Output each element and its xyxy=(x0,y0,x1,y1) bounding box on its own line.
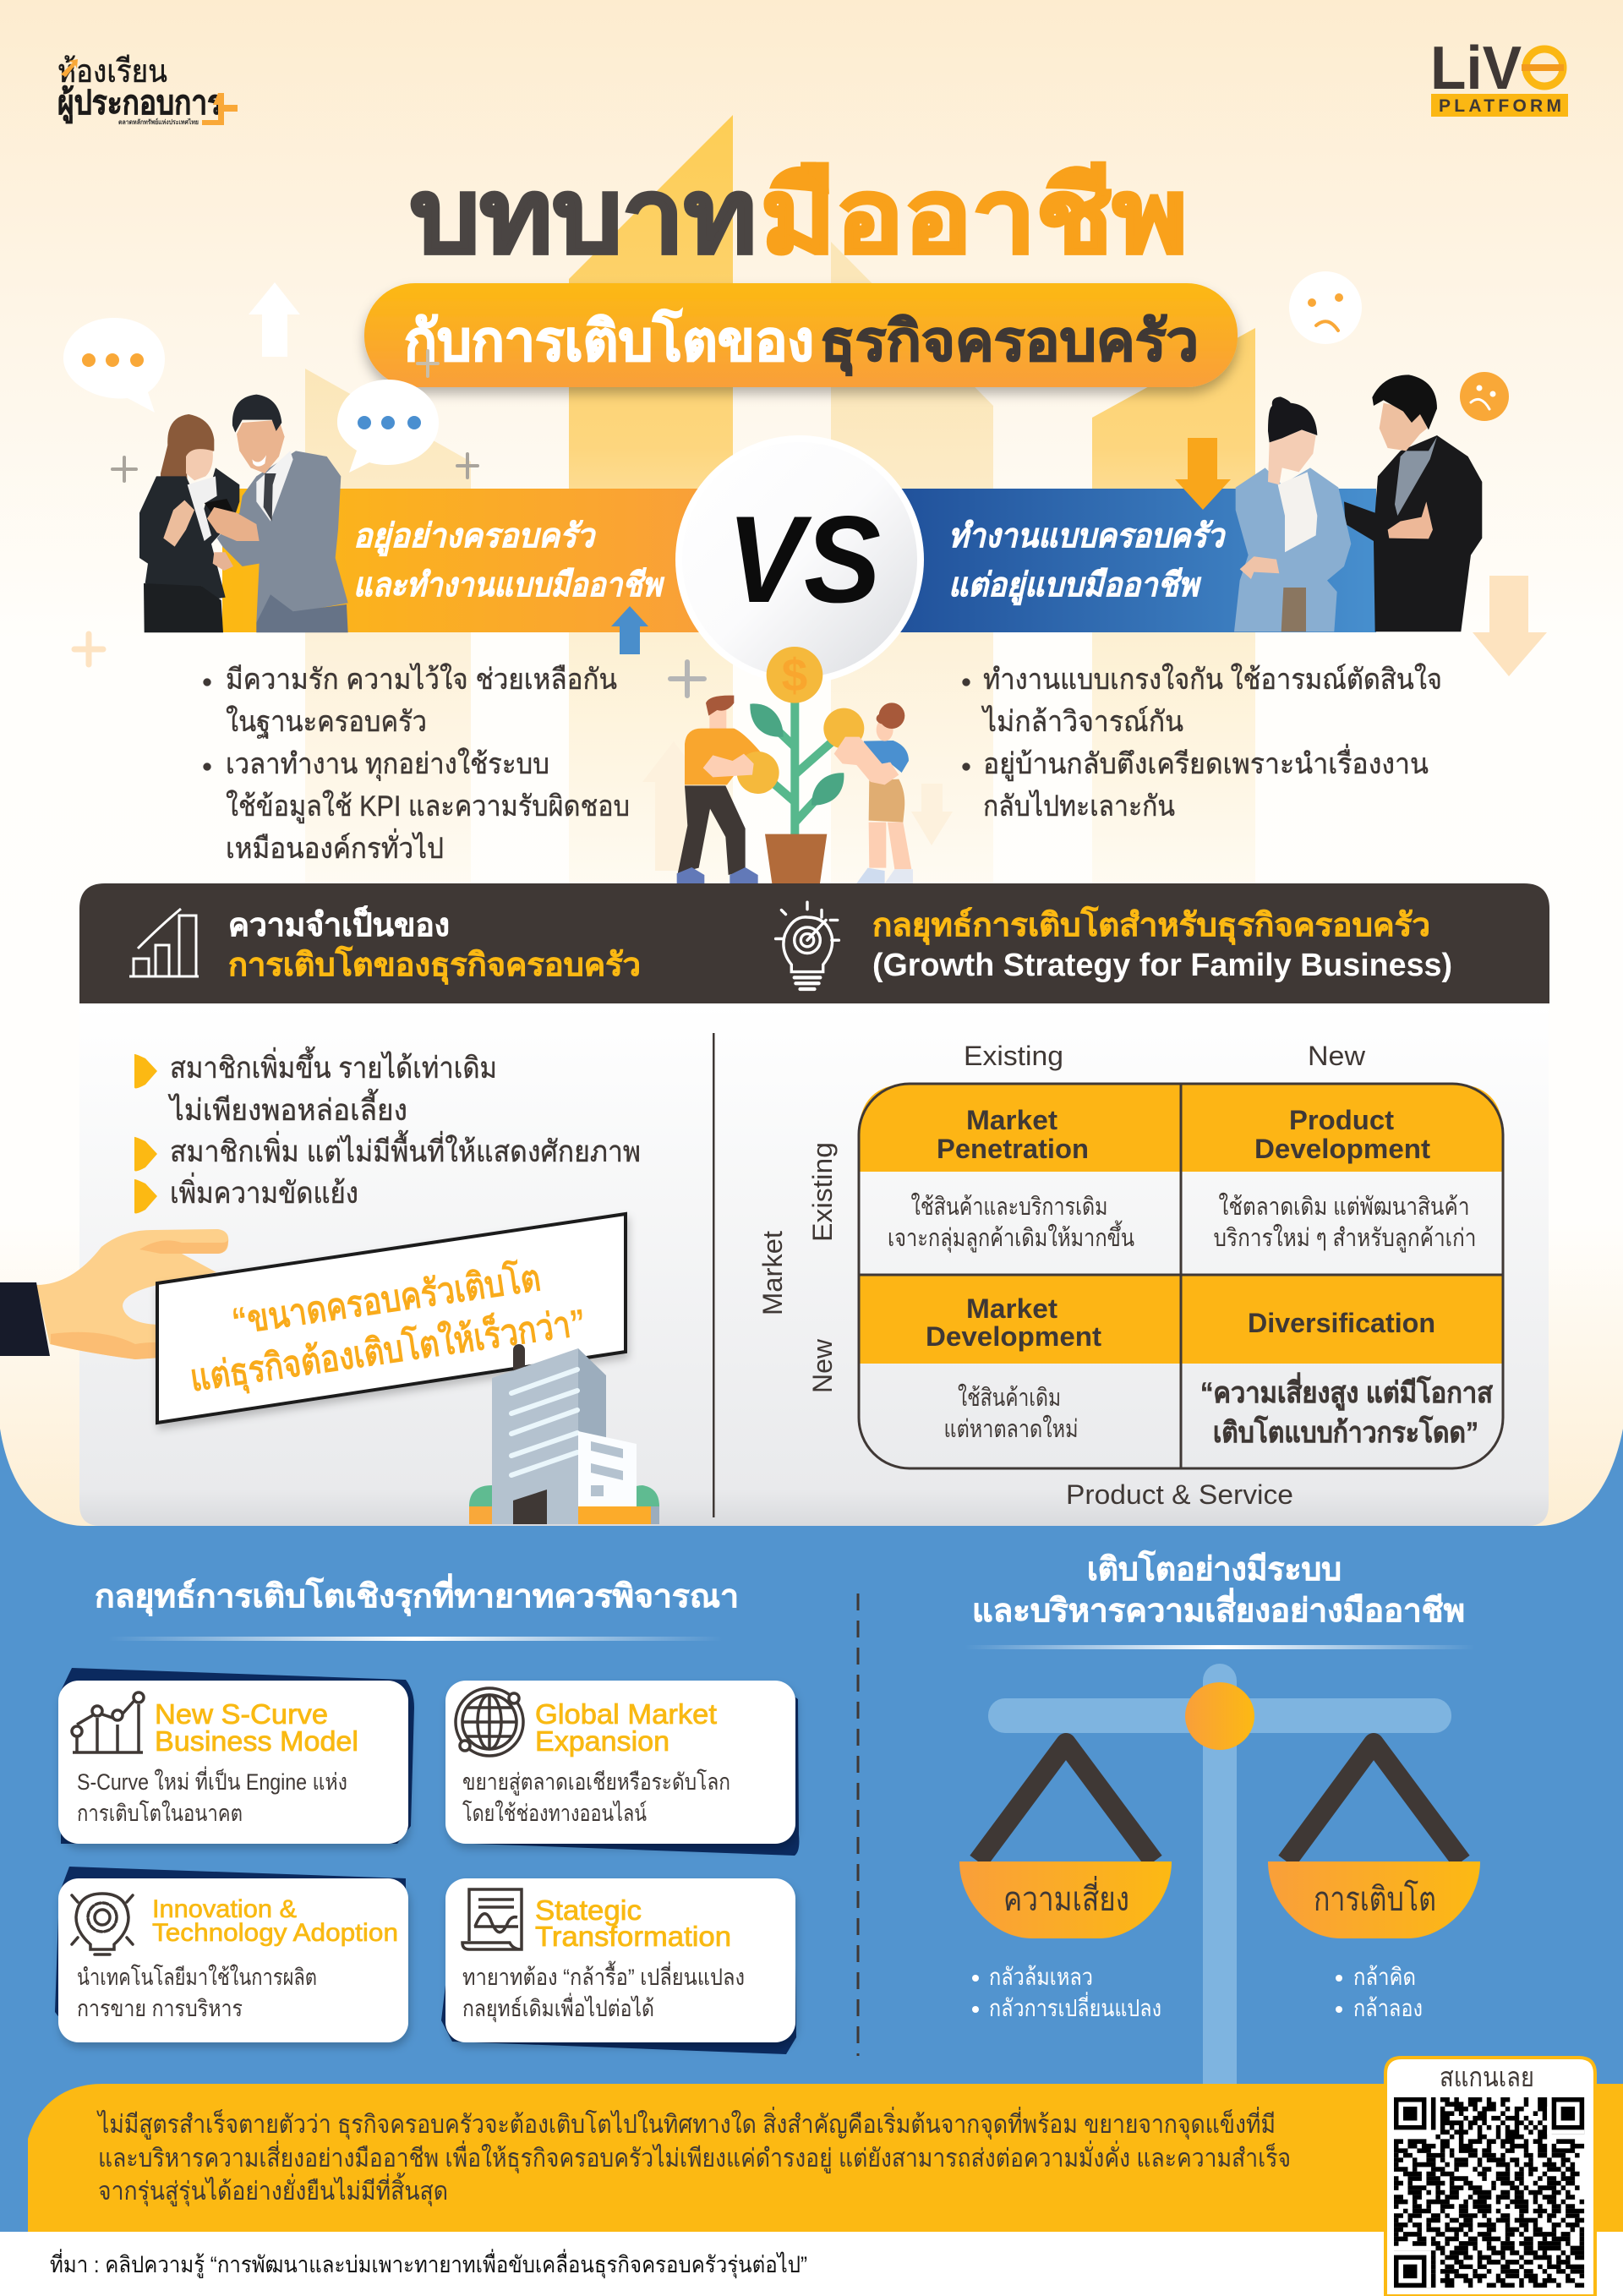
illustration: money plant with two people: $ xyxy=(782,648,807,701)
right pan: growth: การเติบโต xyxy=(1314,1880,1436,1918)
illustration: hand xyxy=(0,1229,228,1359)
cell: market penetration: Penetration xyxy=(937,1134,1089,1164)
subtitle pill: ธุรกิจครอบครัว xyxy=(820,309,1199,376)
list: why growth matters xyxy=(134,1046,641,1213)
icon: white sad face xyxy=(1289,271,1362,344)
cell: product development: บริการใหม่ ๆ สำหรับลูกค้าเก่า xyxy=(1214,1223,1476,1253)
cell: product development: ใช้ตลาดเดิม แต่พัฒนาสินค้า xyxy=(1219,1192,1469,1221)
card: innovation: Innovation & xyxy=(152,1895,297,1923)
cell: market development: Market xyxy=(966,1293,1057,1324)
card: global market xyxy=(445,1681,799,1856)
list: why growth matters: เพิ่มความขัดแย้ง xyxy=(170,1173,358,1210)
banner: left orange xyxy=(222,489,721,632)
VS circle xyxy=(675,435,924,684)
heading: systematic growth xyxy=(965,1550,1475,1649)
title xyxy=(410,159,1188,274)
conclusion banner: และบริหารความเสี่ยงอย่างมืออาชีพ เพื่อให้ธุรกิจครอบครัวไม่เพียงแค่ดำรงอยู่ แต่ยังสามารถส่งต่อความมั่งคั่ง และความสำเร็จ xyxy=(98,2140,1291,2174)
header text: necessity: การเติบโตของธุรกิจครอบครัว xyxy=(228,945,641,985)
callout sign: แต่ธุรกิจต้องเติบโตให้เร็วกว่า” xyxy=(187,1299,588,1402)
header text: growth strategy xyxy=(872,905,1452,983)
background rising arrows xyxy=(305,115,1255,947)
right pan: growth xyxy=(1268,1861,1480,1938)
card: new s-curve: S-Curve ใหม่ ที่เป็น Engine แห่ง xyxy=(77,1766,347,1795)
card: new s-curve: การเติบโตในอนาคต xyxy=(77,1800,243,1826)
icon: speech bubble blue dots xyxy=(337,380,439,473)
logo: ห้องเรียนผู้ประกอบการ xyxy=(57,54,238,126)
conclusion banner xyxy=(28,2084,1623,2232)
bullets: left: ในฐานะครอบครัว xyxy=(226,705,427,739)
people: happy couple xyxy=(139,395,348,632)
blue lower background xyxy=(0,1395,1623,2232)
logo: ห้องเรียนผู้ประกอบการ: ตลาดหลักทรัพย์แห่งประเทศไทย xyxy=(118,118,199,126)
cell: product development: Development xyxy=(1254,1134,1430,1164)
logo: LiVe Platform xyxy=(1430,35,1568,117)
bullets: left: ใช้ข้อมูลใช้ KPI และความรับผิดชอบ xyxy=(226,790,630,823)
icon: globe xyxy=(456,1688,523,1756)
cell: product development: Product xyxy=(1289,1105,1394,1135)
bullets: right: ไม่กล้าวิจารณ์กัน xyxy=(981,705,1183,738)
cell: diversification: “ความเสี่ยงสูง แต่มีโอกาส xyxy=(1200,1372,1493,1411)
callout sign xyxy=(157,1214,626,1423)
list: why growth matters: สมาชิกเพิ่มขึ้น รายได้เท่าเดิม xyxy=(170,1046,497,1085)
source note: ที่มา : คลิปความรู้ “การพัฒนาและบ่มเพาะทายาทเพื่อขับเคลื่อนธุรกิจครอบครัวรุ่นต่อไป” xyxy=(50,2249,807,2279)
cell: diversification: Diversification xyxy=(1248,1308,1435,1338)
list: courage xyxy=(1336,1964,1423,2021)
card: innovation: นำเทคโนโลยีมาใช้ในการผลิต xyxy=(77,1964,317,1990)
cell: market development: ใช้สินค้าเดิม xyxy=(958,1383,1061,1412)
illustration: building xyxy=(469,1344,659,1524)
list: fears: กลัวล้มเหลว xyxy=(989,1964,1093,1990)
matrix orange headers xyxy=(859,1084,1503,1364)
banner text: left: อยู่อย่างครอบครัว xyxy=(353,518,597,556)
card: global market: โดยใช้ช่องทางออนไลน์ xyxy=(462,1800,647,1826)
bullets: right: ทำงานแบบเกรงใจกัน ใช้อารมณ์ตัดสินใจ xyxy=(983,663,1442,696)
subtitle pill xyxy=(364,283,1238,387)
card: strategic transformation: Transformation xyxy=(535,1921,731,1952)
card: strategic transformation: Stategic xyxy=(535,1894,642,1926)
icon: light bulb target xyxy=(776,902,839,989)
qr card xyxy=(1385,2058,1595,2296)
dashed vertical divider xyxy=(857,1594,859,2056)
banner text: right: ทำงานแบบครอบครัว xyxy=(948,518,1227,555)
card: global market: Expansion xyxy=(535,1725,669,1757)
heading: systematic growth: และบริหารความเสี่ยงอย่างมืออาชีพ xyxy=(972,1588,1465,1629)
qr card: สแกนเลย xyxy=(1440,2062,1534,2092)
icon: orange down arrow xyxy=(1175,438,1231,510)
icon: bar chart xyxy=(129,909,199,976)
heading: proactive strategies: กลยุทธ์การเติบโตเชิงรุกที่ทายาทควรพิจารณา xyxy=(95,1573,739,1616)
matrix axis labels: Product & Service xyxy=(1066,1479,1293,1510)
cell: market penetration xyxy=(888,1105,1134,1253)
bullets: left: มีความรัก ความไว้ใจ ช่วยเหลือกัน xyxy=(226,663,617,696)
VS circle: VS xyxy=(727,490,881,628)
matrix axis labels xyxy=(757,1041,1366,1510)
card: strategic transformation: กลยุทธ์เดิมเพื่อไปต่อได้ xyxy=(462,1993,654,2023)
banner text: right xyxy=(948,518,1227,605)
card: innovation: Technology Adoption xyxy=(152,1919,398,1947)
list: why growth matters: ไม่เพียงพอหล่อเลี้ยง xyxy=(167,1088,407,1127)
left pan: risk xyxy=(959,1861,1172,1938)
list: courage: กล้าลอง xyxy=(1353,1995,1423,2021)
cell: market development: แต่หาตลาดใหม่ xyxy=(943,1414,1079,1443)
banner: right blue xyxy=(879,489,1376,632)
title: มืออาชีพ xyxy=(761,159,1188,274)
banner text: left xyxy=(353,518,665,604)
card: strategic transformation xyxy=(441,1878,796,2054)
icon: speech bubble orange dots xyxy=(63,318,165,413)
matrix axis labels: Existing xyxy=(807,1142,838,1242)
card: new s-curve: Business Model xyxy=(155,1725,358,1757)
header text: necessity xyxy=(228,905,641,985)
icon: orange sad face xyxy=(1460,372,1509,421)
white footer background xyxy=(0,2232,1623,2296)
cell: market penetration: Market xyxy=(966,1105,1057,1135)
icon: gear bulb xyxy=(72,1894,133,1954)
icon: growth chart xyxy=(72,1692,144,1752)
card: global market: Global Market xyxy=(535,1698,717,1730)
card: strategic transformation: ทายาทต้อง “กล้ารื้อ” เปลี่ยนแปลง xyxy=(462,1960,745,1990)
conclusion banner: ไม่มีสูตรสำเร็จตายตัวว่า ธุรกิจครอบครัวจะต้องเติบโตไปในทิศทางใด สิ่งสำคัญคือเริ่มต้นจากจุดที่พร้อม ขยายจากจุดแข็งที่มี xyxy=(96,2107,1276,2140)
card: new s-curve xyxy=(58,1668,414,1844)
left pan chains xyxy=(978,1743,1154,1861)
people: worried couple xyxy=(1234,374,1482,631)
bullets: right xyxy=(962,663,1442,823)
cream upper background xyxy=(0,0,1623,1526)
callout sign: “ขนาดครอบครัวเติบโต xyxy=(229,1255,544,1342)
matrix axis labels: Existing xyxy=(964,1041,1063,1071)
heading: systematic growth: เติบโตอย่างมีระบบ xyxy=(1087,1550,1342,1588)
cell: diversification xyxy=(1200,1308,1493,1449)
banner text: left: และทำงานแบบมืออาชีพ xyxy=(353,567,665,604)
logo: LiVe Platform: LiV xyxy=(1430,35,1522,102)
banner text: right: แต่อยู่แบบมืออาชีพ xyxy=(948,567,1202,605)
icon: white up arrow xyxy=(249,282,300,357)
matrix outline xyxy=(859,1084,1503,1468)
left pan: risk: ความเสี่ยง xyxy=(1003,1876,1129,1918)
list: courage: กล้าคิด xyxy=(1353,1964,1416,1990)
cell: market penetration: ใช้สินค้าและบริการเดิม xyxy=(911,1192,1107,1221)
right pan chains xyxy=(1287,1743,1462,1861)
bullets: left xyxy=(203,663,630,865)
icon: document chart xyxy=(462,1889,522,1949)
icon: blue up arrow xyxy=(611,606,648,654)
bullets: right: กลับไปทะเลาะกัน xyxy=(983,790,1175,823)
card: global market: ขยายสู่ตลาดเอเชียหรือระดับโลก xyxy=(462,1769,730,1796)
cell: diversification: เติบโตแบบก้าวกระโดด” xyxy=(1213,1415,1478,1449)
center divider xyxy=(713,1033,715,1517)
header text: necessity: ความจำเป็นของ xyxy=(228,905,450,943)
card: innovation: การขาย การบริหาร xyxy=(77,1996,243,2021)
illustration: money plant with two people xyxy=(677,647,913,883)
list: fears xyxy=(972,1964,1161,2021)
conclusion banner: จากรุ่นสู่รุ่นได้อย่างยั่งยืนไม่มีที่สิ้นสุด xyxy=(98,2173,448,2207)
cell: market penetration: เจาะกลุ่มลูกค้าเดิมให้มากขึ้น xyxy=(888,1220,1134,1253)
bullets: right: อยู่บ้านกลับตึงเครียดเพราะนำเรื่องงาน xyxy=(983,744,1429,781)
cell: product development xyxy=(1214,1105,1476,1253)
icon: pale down arrow xyxy=(1473,576,1547,676)
title: บทบาท xyxy=(410,159,757,274)
logo: ห้องเรียนผู้ประกอบการ: ผู้ประกอบการ xyxy=(57,85,222,123)
matrix axis labels: New xyxy=(807,1338,838,1393)
logo: ห้องเรียนผู้ประกอบการ: ห้องเรียน xyxy=(57,54,167,90)
matrix axis labels: Market xyxy=(757,1231,788,1315)
header text: growth strategy: (Growth Strategy for Family Business) xyxy=(872,948,1452,983)
cell: market development: Development xyxy=(926,1321,1101,1352)
list: why growth matters: สมาชิกเพิ่ม แต่ไม่มีพื้นที่ให้แสดงศักยภาพ xyxy=(170,1129,641,1168)
ansoff matrix xyxy=(757,1041,1503,1510)
cell: market development xyxy=(926,1293,1101,1443)
lower light panel xyxy=(79,1003,1549,1526)
subtitle pill: กับการเติบโตของ xyxy=(404,308,814,372)
matrix axis labels: New xyxy=(1308,1041,1366,1071)
heading: proactive strategies xyxy=(95,1573,739,1641)
bullets: left: เวลาทำงาน ทุกอย่างใช้ระบบ xyxy=(226,747,549,781)
header text: growth strategy: กลยุทธ์การเติบโตสำหรับธุรกิจครอบครัว xyxy=(872,905,1430,945)
qr code xyxy=(1394,2100,1584,2285)
card: new s-curve: New S-Curve xyxy=(155,1698,328,1730)
plus marks xyxy=(74,351,704,696)
balance scale xyxy=(959,1664,1480,2103)
list: fears: กลัวการเปลี่ยนแปลง xyxy=(989,1992,1161,2021)
card: innovation xyxy=(55,1867,408,2042)
qr finder patterns xyxy=(1394,2097,1584,2288)
bullets: left: เหมือนองค์กรทั่วไป xyxy=(226,828,444,865)
logo: LiVe Platform: PLATFORM xyxy=(1439,96,1561,116)
dark header bar xyxy=(79,883,1549,1003)
